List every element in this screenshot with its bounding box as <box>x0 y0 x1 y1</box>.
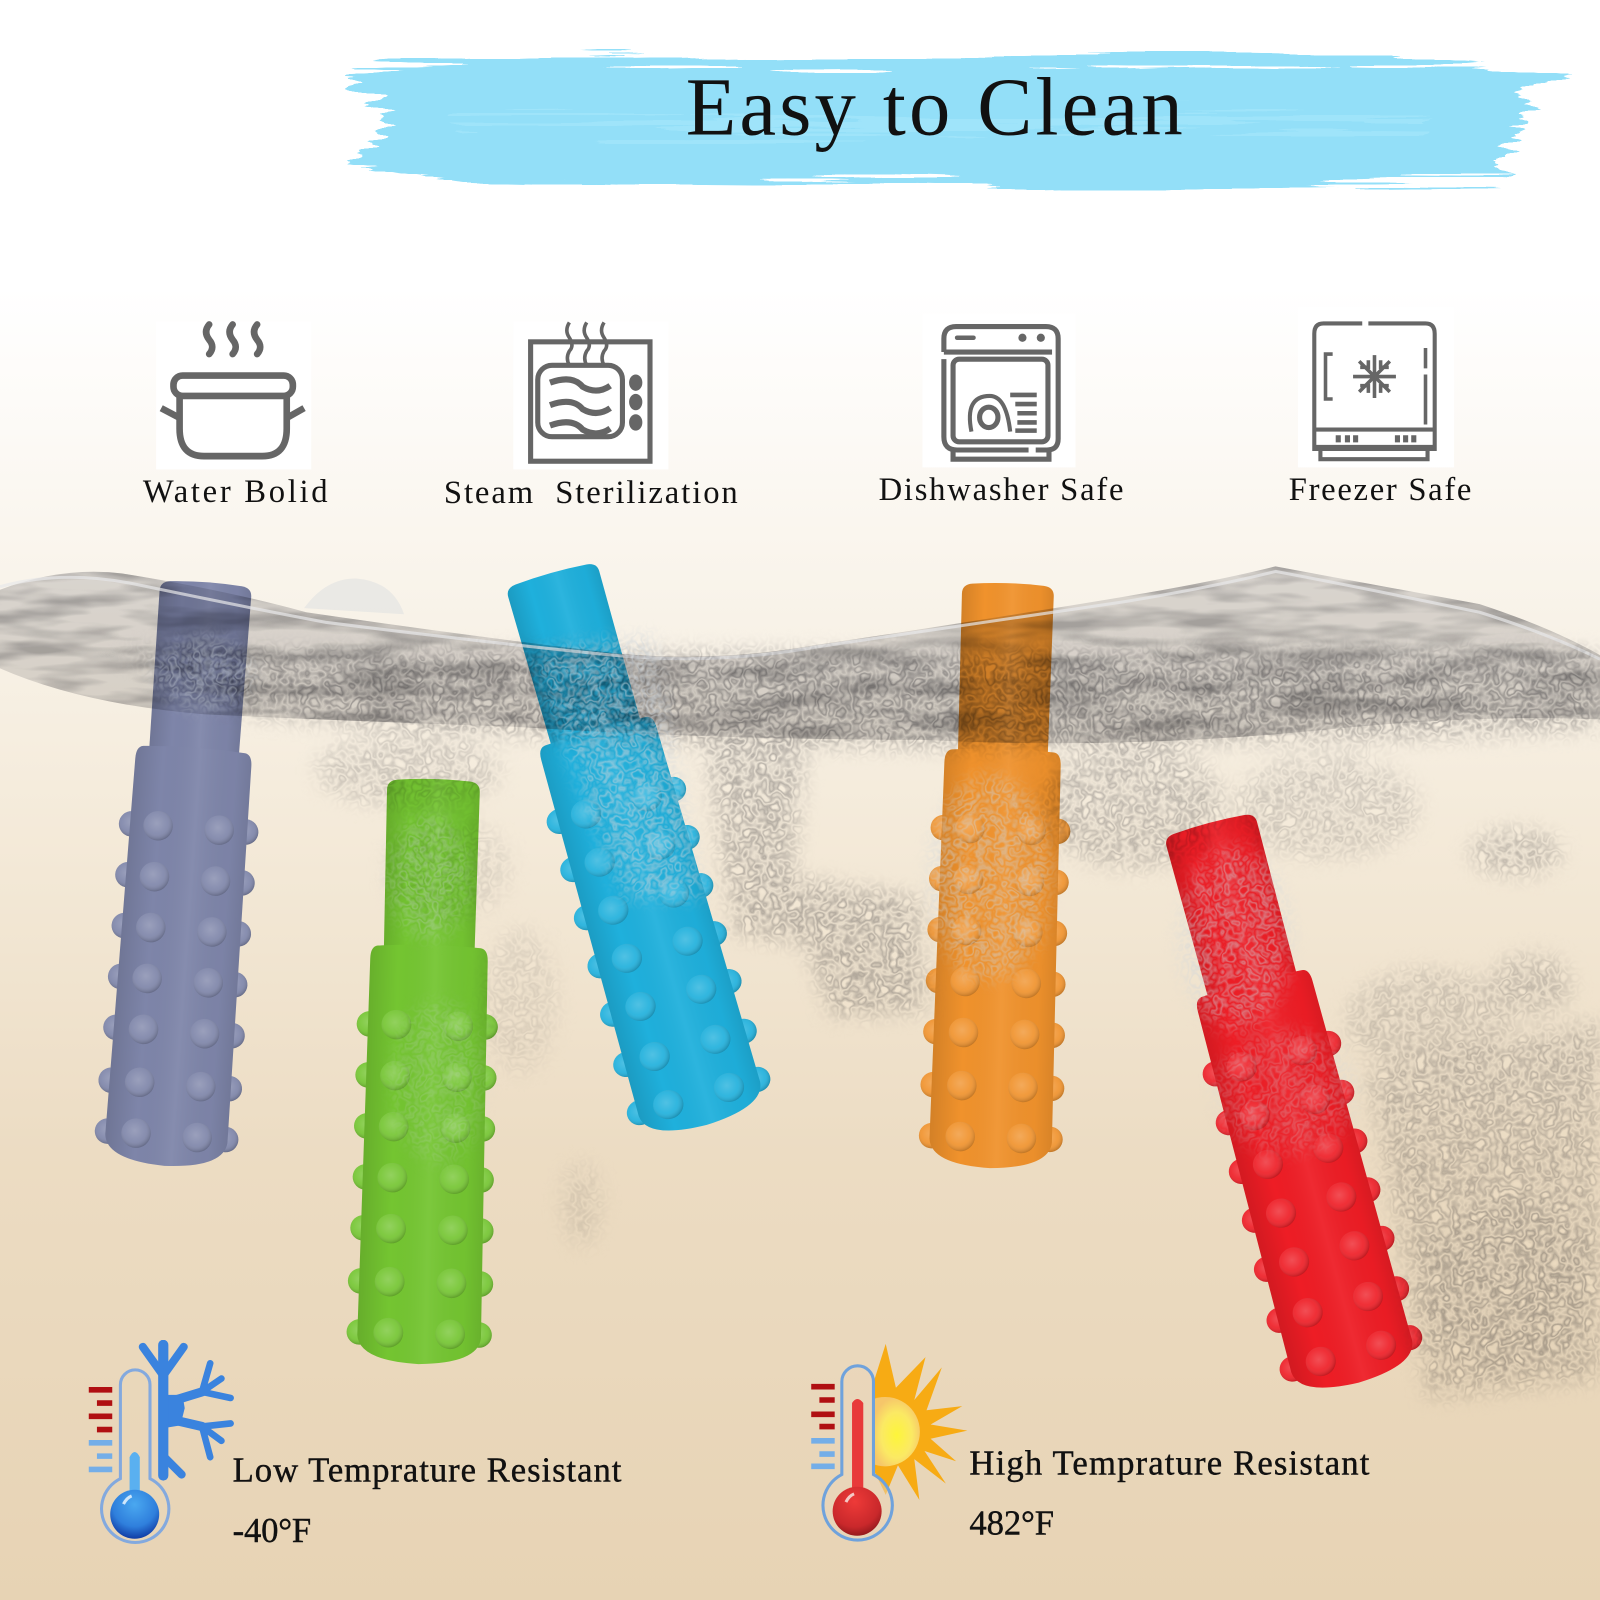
icon: boiling pot <box>156 321 311 469</box>
label: water bolid: Water Bolid <box>143 474 328 510</box>
panel: freezer safe icon and label <box>1289 307 1471 508</box>
bubble clouds under the water <box>122 653 1600 1398</box>
teether: gray-blue <box>93 577 278 1171</box>
water surface highlight line <box>0 571 1600 659</box>
label: dishwasher safe: Dishwasher Safe <box>879 472 1123 508</box>
value: 482 F: 482°F <box>969 1504 1054 1543</box>
panel: high temperature resistance <box>811 1344 1370 1543</box>
teether: orange <box>918 581 1080 1170</box>
panel: dishwasher safe icon and label <box>879 313 1123 508</box>
label: freezer safe: Freezer Safe <box>1289 472 1471 508</box>
label: low temperature: Low Temprature Resistant <box>233 1451 622 1490</box>
icon: steam microwave <box>513 321 668 469</box>
icon: dishwasher <box>922 313 1076 467</box>
dome bubble at the surface <box>304 579 404 614</box>
icon: freezer <box>1298 307 1454 467</box>
teether: red <box>1138 804 1430 1402</box>
icon: sun <box>873 1344 967 1500</box>
icon: snowflake <box>143 1345 231 1476</box>
icon: cold thermometer <box>89 1370 169 1542</box>
icon: hot thermometer <box>811 1366 892 1540</box>
panel: water boiled icon and label <box>143 321 328 510</box>
bubbles over the products <box>153 633 1357 1163</box>
title banner: blue brush stroke <box>352 55 1561 190</box>
panel: low temperature resistance <box>89 1345 622 1550</box>
panel: steam sterilization icon and label <box>444 321 738 511</box>
label: steam sterilization: Steam Sterilization <box>444 475 738 511</box>
teether: blue <box>479 553 778 1145</box>
title: Easy to Clean <box>686 61 1183 153</box>
teether: green <box>346 777 506 1366</box>
value: -40 F: -40°F <box>233 1511 311 1550</box>
label: high temperature: High Temprature Resistant <box>969 1443 1370 1482</box>
water surface band <box>0 566 1600 743</box>
